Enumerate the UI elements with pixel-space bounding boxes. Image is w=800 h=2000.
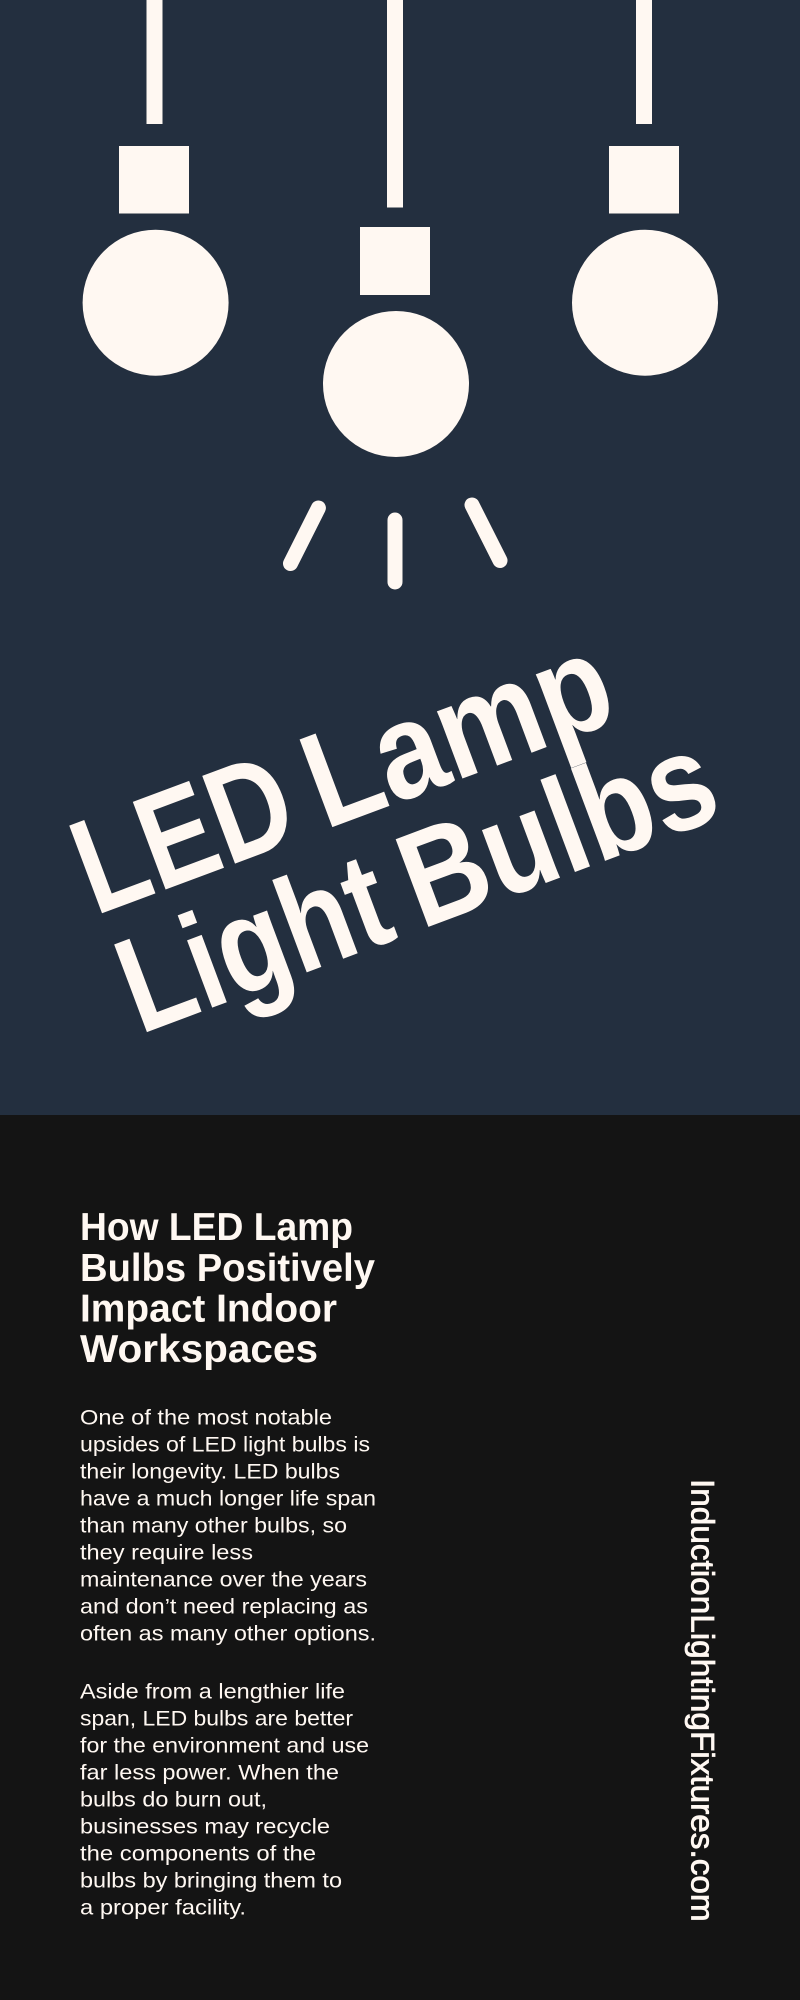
text block: first paragraph: One of the most notable [80, 1406, 332, 1430]
text block: second paragraph: span, LED bulbs are better [80, 1706, 353, 1730]
icon: right hanging bulb [572, 0, 718, 376]
heading: Bulbs Positively [80, 1247, 376, 1290]
heading: Workspaces [80, 1328, 318, 1371]
text block: first paragraph: have a much longer life span [80, 1486, 376, 1510]
text block: first paragraph [80, 1406, 376, 1646]
title [52, 582, 736, 1062]
icon: light rays under centre bulb [290, 505, 500, 582]
title: Light [97, 823, 410, 1062]
text block: first paragraph: than many other bulbs, so [80, 1514, 347, 1538]
title: LED [52, 724, 314, 944]
title: Lamp [282, 604, 632, 858]
text block: second paragraph: bulbs do burn out, [80, 1788, 267, 1812]
heading: How LED Lamp [80, 1206, 353, 1249]
text block: first paragraph: upsides of LED light bulbs is [80, 1432, 370, 1456]
panel: black bottom section [0, 1115, 800, 2000]
text block: second paragraph [80, 1680, 369, 1920]
text block: first paragraph: their longevity. LED bulbs [80, 1460, 340, 1484]
text block: second paragraph: bulbs by bringing them to [80, 1868, 342, 1892]
icon: left hanging bulb [83, 0, 229, 376]
text block: first paragraph: often as many other options. [80, 1622, 376, 1646]
text block: second paragraph: far less power. When the [80, 1760, 339, 1784]
text block: second paragraph: the components of the [80, 1842, 316, 1866]
text block: second paragraph: a proper facility. [80, 1896, 246, 1920]
heading: Impact Indoor [80, 1288, 337, 1330]
text block: second paragraph: Aside from a lengthier life [80, 1680, 345, 1704]
text block: first paragraph: maintenance over the years [80, 1568, 367, 1592]
icon: centre hanging bulb [323, 0, 469, 457]
text block: first paragraph: they require less [80, 1540, 253, 1564]
text block: second paragraph: for the environment and use [80, 1734, 369, 1758]
text block: first paragraph: and don’t need replacing as [80, 1594, 368, 1618]
panel: navy top section [0, 0, 800, 1115]
text block: second paragraph: businesses may recycle [80, 1814, 330, 1838]
title: Bulbs [378, 700, 736, 957]
vertical website text: InductionLightingFixtures.com [685, 1479, 721, 1922]
heading [80, 1206, 376, 1371]
